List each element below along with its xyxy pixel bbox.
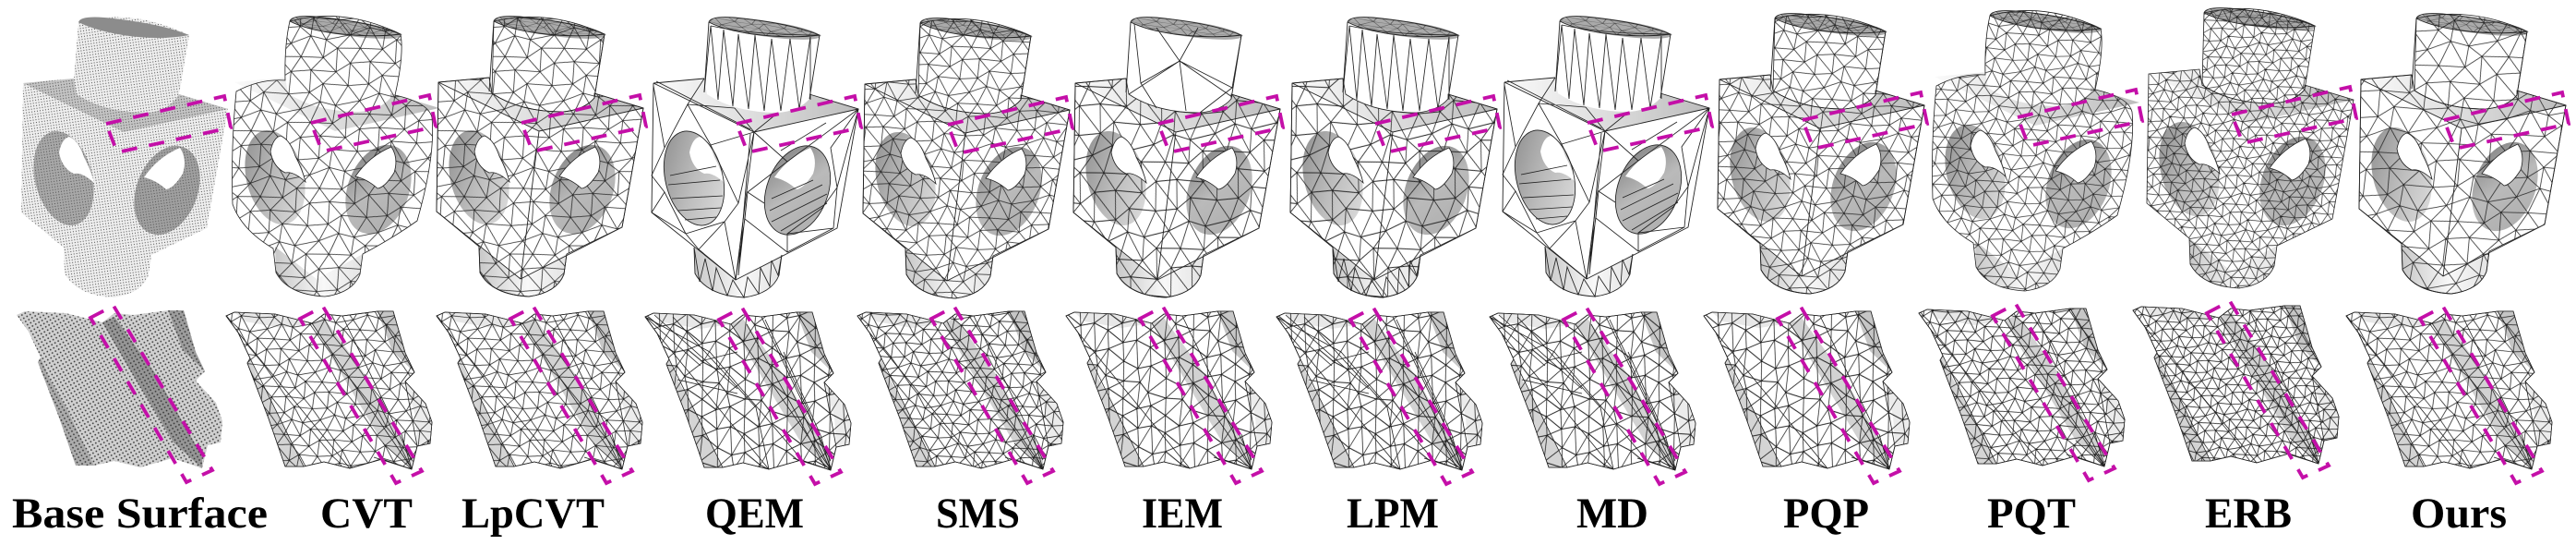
mesh: LpCVT helix [437,307,642,483]
panel: Base Surface [12,17,268,538]
mesh: base surface block [21,17,231,297]
mesh: ERB helix [2133,301,2339,478]
label: CVT [320,490,413,538]
mesh: Ours block [2359,9,2569,294]
panel: MD [1490,12,1712,538]
label: ERB [2205,490,2292,538]
mesh: ERB block [2147,4,2356,288]
mesh: base surface helix [17,306,222,482]
mesh: CVT block [233,12,439,297]
panel: ERB [2133,4,2356,538]
mesh: PQT block [1933,6,2142,291]
mesh: CVT helix [226,307,432,483]
mesh: IEM helix [1066,307,1272,483]
highlight box [90,306,212,482]
mesh: LPM block [1290,13,1500,297]
mesh: PQT helix [1919,304,2125,480]
mesh: PQP block [1718,9,1927,294]
label: PQP [1783,490,1869,538]
highlight box [106,96,231,152]
panel: LpCVT [437,12,646,538]
mesh: SMS helix [857,307,1063,483]
mesh: MD block [1503,12,1712,297]
label: LPM [1347,490,1439,538]
mesh: IEM block [1073,13,1283,297]
mesh: LpCVT block [437,12,646,297]
panel: QEM [645,13,861,538]
mesh: QEM helix [645,308,851,484]
mesh: Ours helix [2346,307,2552,483]
panel: IEM [1066,13,1283,538]
panel: PQT [1919,6,2142,538]
label: MD [1576,490,1648,538]
mesh: MD helix [1490,308,1695,484]
label: IEM [1142,490,1223,538]
panel: Ours [2346,9,2569,538]
mesh: PQP helix [1704,307,1910,483]
label: Ours [2411,490,2507,538]
panel: SMS [857,14,1072,538]
mesh: SMS block [863,14,1072,298]
mesh: QEM block [652,13,861,297]
label: PQT [1987,490,2076,538]
highlight box [311,95,436,151]
panel: LPM [1276,13,1500,538]
mesh: LPM helix [1276,308,1482,484]
panel: CVT [226,12,439,538]
label: LpCVT [461,490,605,538]
label: Base Surface [12,490,268,538]
panel: PQP [1704,9,1927,538]
label: QEM [705,490,804,538]
label: SMS [936,490,1020,538]
